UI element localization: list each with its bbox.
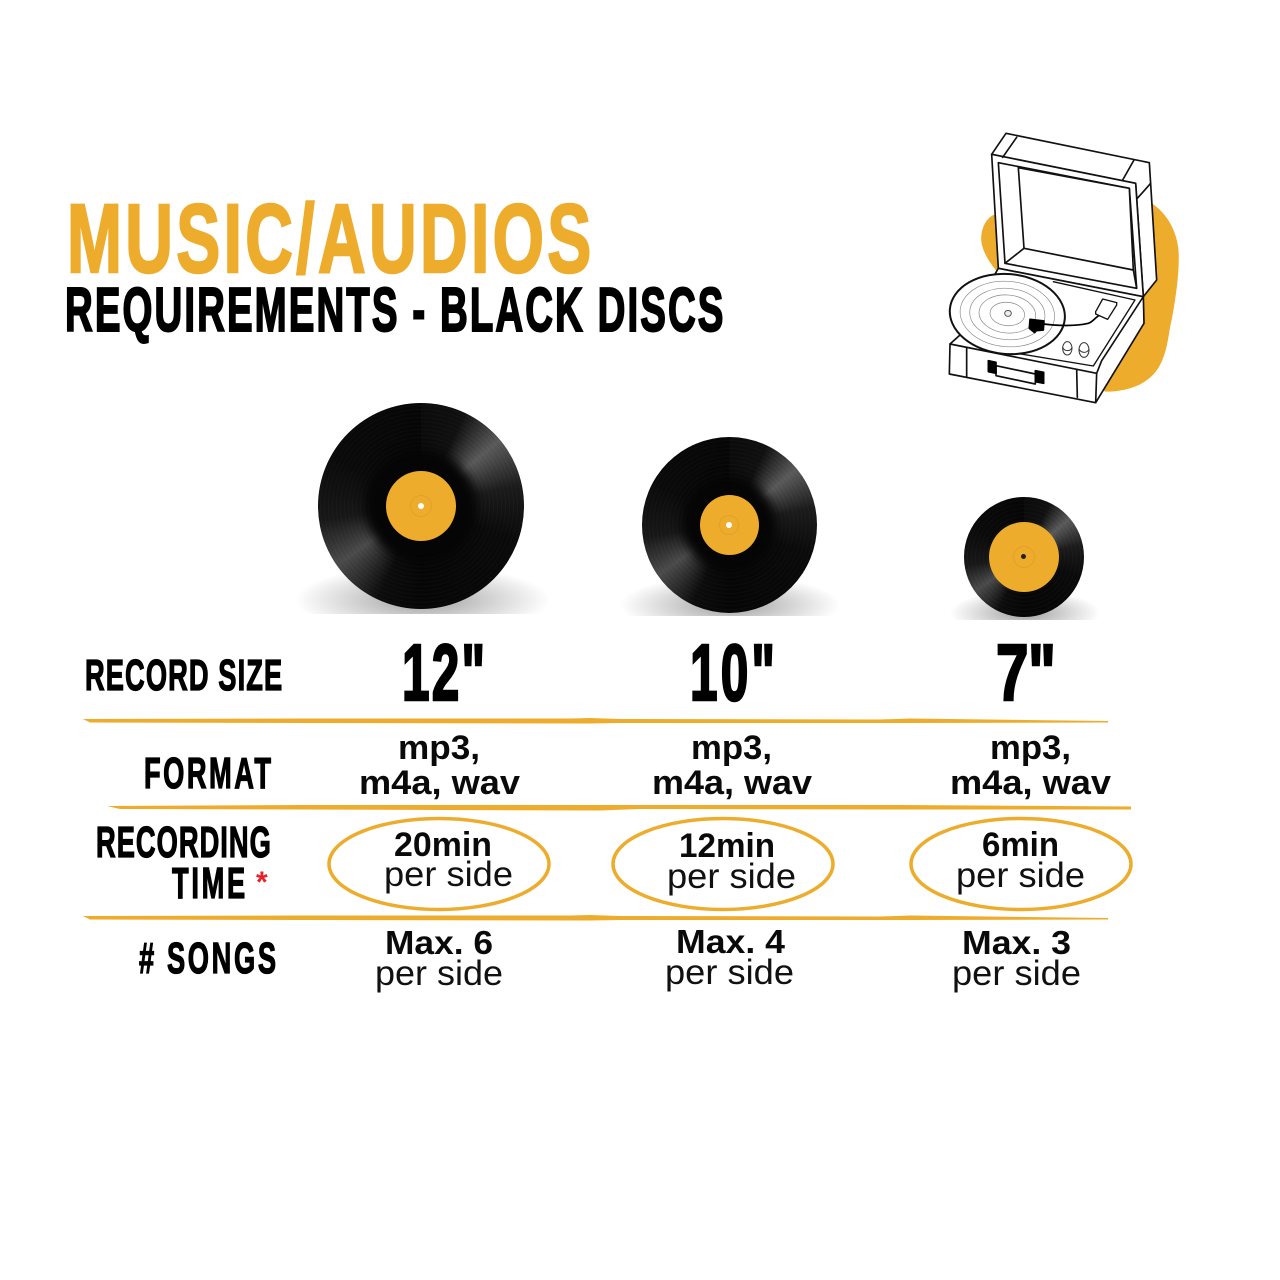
callout: 20min per side bbox=[329, 818, 549, 910]
songs: 10 inch bbox=[665, 923, 794, 992]
format: 12 inch: m4a, wav bbox=[359, 764, 520, 802]
callout: 6min per side: 6min bbox=[982, 826, 1059, 864]
callout: 12min per side: per side bbox=[667, 857, 796, 896]
icon: record player bbox=[946, 133, 1179, 403]
format: 10 inch: m4a, wav bbox=[652, 764, 812, 802]
row label: format: FORMAT bbox=[144, 748, 271, 798]
disc: 10 inch record bbox=[630, 437, 830, 616]
songs: 10 inch: Max. 4 bbox=[676, 923, 786, 960]
songs: 7 inch bbox=[952, 924, 1081, 993]
songs: 12 inch bbox=[375, 924, 503, 993]
row label: recording time bbox=[96, 817, 271, 908]
format: 10 inch bbox=[652, 729, 812, 802]
songs: 12 inch: Max. 6 bbox=[385, 924, 493, 961]
format: 7 inch bbox=[950, 729, 1111, 802]
row label: recording time: * bbox=[256, 866, 268, 899]
callout: 6min per side: per side bbox=[956, 856, 1085, 895]
format: 10 inch: mp3, bbox=[691, 729, 772, 767]
size: 12 inch: 12" bbox=[402, 629, 485, 718]
format: 12 inch: mp3, bbox=[398, 729, 480, 767]
format: 12 inch bbox=[359, 729, 520, 802]
size: 10 inch: 10" bbox=[690, 629, 775, 718]
subtitle: REQUIREMENTS - BLACK DISCS bbox=[65, 275, 723, 344]
callout: 12min per side: 12min bbox=[679, 827, 775, 865]
callout: 12min per side bbox=[613, 818, 833, 910]
callout: 6min per side bbox=[911, 818, 1131, 910]
format: 7 inch: m4a, wav bbox=[950, 764, 1111, 802]
songs: 10 inch: per side bbox=[665, 953, 794, 992]
callout: 20min per side: per side bbox=[384, 855, 513, 894]
row label: recording time: TIME bbox=[172, 858, 245, 908]
size: 7 inch: 7" bbox=[996, 628, 1056, 717]
callout: 20min per side: 20min bbox=[394, 826, 492, 864]
disc: 12 inch record bbox=[306, 403, 538, 614]
row label: record size: RECORD SIZE bbox=[85, 650, 282, 700]
title: MUSIC/AUDIOS bbox=[67, 184, 591, 293]
songs: 7 inch: Max. 3 bbox=[962, 924, 1071, 961]
format: 7 inch: mp3, bbox=[990, 729, 1071, 767]
songs: 12 inch: per side bbox=[375, 954, 503, 993]
songs: 7 inch: per side bbox=[952, 954, 1081, 993]
row label: songs: # SONGS bbox=[139, 933, 276, 983]
row label: recording time: RECORDING bbox=[96, 817, 271, 867]
disc: 7 inch record bbox=[956, 497, 1094, 620]
